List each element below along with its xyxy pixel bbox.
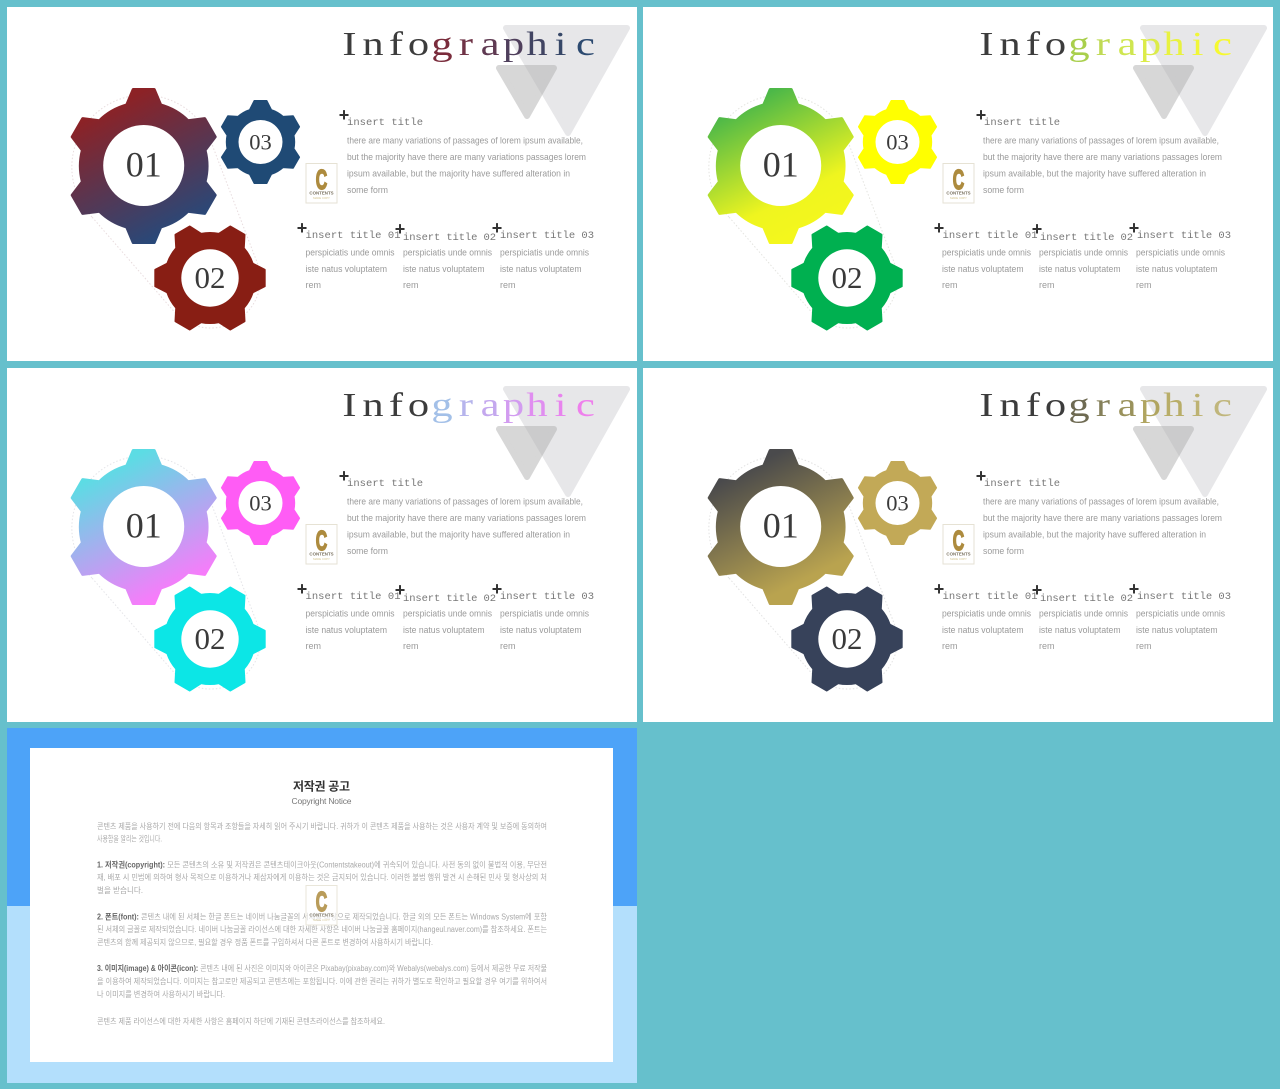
text block: title 01: + <box>934 579 944 599</box>
text block: title 01: rem <box>306 279 321 290</box>
text block: title 03: + <box>1129 218 1139 238</box>
text block: title 02: iste natus voluptatem <box>403 624 485 635</box>
text block: title 01: iste natus voluptatem <box>942 624 1024 635</box>
text block: main: insert title <box>347 478 423 490</box>
text block: main: ipsum available, but the majority have suffered alteration in <box>347 168 570 178</box>
gear 03 <box>222 462 299 544</box>
title: Infographi c <box>342 387 595 424</box>
text block: title 03: iste natus voluptatem <box>500 263 582 274</box>
text block: title 02 <box>395 580 496 651</box>
text block: main: there are many variations of passages of lorem ipsum available, <box>983 496 1219 506</box>
text block: title 02: insert title 02 <box>403 593 496 605</box>
text block: title 03: + <box>1129 579 1139 599</box>
text block: title 02: rem <box>1039 640 1055 651</box>
text block: title 03: insert title 03 <box>1137 230 1231 242</box>
dotted outline around gears <box>72 95 261 328</box>
logo <box>943 524 974 564</box>
panel: infographic dark red and navy <box>7 7 637 361</box>
logo: MADE COPY <box>313 557 330 561</box>
decorative triangles <box>499 389 627 494</box>
text block: title 02 <box>395 219 496 290</box>
text block: title 03: rem <box>500 279 516 290</box>
title: Infographi c <box>342 26 595 63</box>
text block: title 03: insert title 03 <box>1137 591 1231 603</box>
logo: CONTENTS <box>946 552 971 556</box>
logo: C <box>316 525 327 556</box>
text block: main: + <box>339 466 349 486</box>
gear 03 <box>859 462 936 544</box>
gear 03: 03 <box>886 130 909 154</box>
text block: title 02: perspiciatis unde omnis <box>1039 608 1128 618</box>
text block: main <box>976 105 1222 195</box>
text block: main <box>339 466 586 556</box>
text block: title 02: + <box>395 219 405 239</box>
text block: main: insert title <box>984 117 1060 129</box>
text block: title 01: + <box>934 218 944 238</box>
logo <box>306 164 337 203</box>
text block: image and icon <box>97 963 547 999</box>
text block: title 01: insert title 01 <box>942 591 1038 603</box>
text block: title 03: + <box>492 218 502 238</box>
text block: main: but the majority have there are many variations passages lorem <box>983 512 1222 523</box>
gear 01: 01 <box>126 144 162 184</box>
text block: title 01: iste natus voluptatem <box>942 263 1024 274</box>
text block: main: + <box>976 105 986 125</box>
text block: title 02: rem <box>403 279 419 290</box>
text block: title 03: rem <box>1136 640 1152 651</box>
text block: title 02: rem <box>1039 279 1055 290</box>
text block: title 03: perspiciatis unde omnis <box>1136 246 1225 258</box>
text block: image and icon: 나 이미지를 변경하여 사용하시기 바랍니다. <box>97 989 225 999</box>
gear 01 <box>72 450 215 604</box>
gear 02: 02 <box>832 621 862 656</box>
text block: title 03: insert title 03 <box>500 230 594 242</box>
gear 01: 01 <box>126 506 162 546</box>
panel: copyright notice <box>7 728 637 1083</box>
gear 03 <box>859 101 936 183</box>
text block: main: ipsum available, but the majority have suffered alteration in <box>347 528 570 540</box>
text block: copyright: 벌을 받습니다. <box>97 885 143 895</box>
logo: C <box>953 525 964 556</box>
text block: title 01: rem <box>306 640 321 651</box>
logo: CONTENTS <box>309 912 334 918</box>
text block: image and icon: 을 이용하여 제작되었습니다. 이미지는 참고로만 제공되고 콘텐츠에는 포함됩니다. 이에 관한 권리는 귀하가 별도로 확인하고 필요할 경우 여기를 위하여서 <box>97 976 547 986</box>
text block: title 01: insert title 01 <box>306 591 400 603</box>
dotted outline around gears <box>709 456 898 689</box>
text block: title 03: rem <box>500 640 516 651</box>
text block: copyright <box>97 860 547 895</box>
text block: intro: 콘텐츠 제품을 사용하기 전에 다음의 항목과 조항들을 자세히 읽어 주시기 바랍니다. 귀하가 이 콘텐츠 제품을 사용하는 것은 사용자 계약 및 보증에 동의하여 <box>97 821 547 831</box>
logo: MADE COPY <box>313 196 330 200</box>
text block: title 01: perspiciatis unde omnis <box>942 246 1031 258</box>
panel: infographic cyan and pink <box>7 368 637 722</box>
logo: MADE COPY <box>313 918 330 922</box>
decorative triangles <box>1136 389 1264 494</box>
text block: main: but the majority have there are many variations passages lorem <box>983 151 1222 162</box>
title: Infographi c <box>979 26 1232 63</box>
text block: main: ipsum available, but the majority have suffered alteration in <box>983 168 1206 178</box>
text block: title 01 <box>934 218 1038 290</box>
gear 02: 02 <box>194 260 226 295</box>
gear 01 <box>709 90 852 242</box>
gear 01: 01 <box>763 144 799 184</box>
heading: copyright notice: 저작권 공고 <box>293 778 350 794</box>
text block: title 02: perspiciatis unde omnis <box>403 608 492 618</box>
text block: title 03: perspiciatis unde omnis <box>500 608 589 618</box>
logo <box>943 164 974 203</box>
text block: title 01: insert title 01 <box>306 230 400 242</box>
text block: title 02: insert title 02 <box>1040 232 1133 244</box>
heading: copyright notice: Copyright Notice <box>292 796 352 806</box>
gear 02 <box>775 566 919 712</box>
gear 02 <box>138 566 282 712</box>
text block: main: some form <box>983 184 1024 195</box>
text block: main <box>339 105 586 195</box>
text block: title 02 <box>1032 219 1133 290</box>
text block: font: 콘텐츠의 함께 제공되지 않으므로, 필요할 경우 정품 폰트를 구입하셔서 다른 폰트로 변경하여 사용하시기 바랍니다. <box>97 937 433 947</box>
panel: infographic charcoal and gold <box>643 368 1273 722</box>
logo: C <box>316 164 327 195</box>
text block: title 03: + <box>492 579 502 599</box>
text block: main: some form <box>983 545 1024 556</box>
text block: title 02 <box>1032 580 1133 651</box>
text block: title 03: iste natus voluptatem <box>1136 263 1218 274</box>
text block: title 02: + <box>1032 580 1042 600</box>
text block: copyright: 재, 배포 시 민법에 의하여 형사 목적으로 이용하거나 제삼자에게 이용하는 것은 금지되어 있습니다. 이러한 불법 행위 발견 시 손해된 민사 및 형사상의 처 <box>97 872 547 882</box>
text block: image and icon: 3. 이미지(image) & 아이콘(icon): 콘텐츠 내에 된 사진은 이미지와 아이콘은 Pixabay(pixabay.com)와 Webalys(webalys.com) 등에서 제공한 무료 저작물 <box>97 963 547 973</box>
text block: title 01 <box>297 579 400 651</box>
text block: copyright: 1. 저작권(copyright): 모든 콘텐츠의 소유 및 저작권은 콘텐츠테이크아웃(Contentstakeout)에 귀속되어 있습니다. 사전 동의 없이 불법적 이용, 무단전 <box>97 860 547 870</box>
gear 03: 03 <box>249 130 272 154</box>
text block: title 03: iste natus voluptatem <box>1136 624 1218 635</box>
logo <box>306 524 337 564</box>
logo: C <box>953 164 964 195</box>
dotted outline around gears <box>72 456 261 689</box>
text block: main: there are many variations of passages of lorem ipsum available, <box>347 496 583 506</box>
text block: title 03 <box>1129 579 1231 651</box>
text block: title 01: + <box>297 218 307 238</box>
gear 02: 02 <box>832 260 862 295</box>
text block: main: there are many variations of passages of lorem ipsum available, <box>347 134 583 146</box>
text block: title 03: perspiciatis unde omnis <box>500 246 589 258</box>
gear 03: 03 <box>249 490 272 516</box>
text block: font <box>97 912 548 947</box>
text block: title 01: + <box>297 579 307 599</box>
dotted outline around gears <box>709 95 898 328</box>
text block: main: insert title <box>347 117 423 129</box>
text block: title 03 <box>492 579 594 651</box>
logo: MADE COPY <box>950 196 967 200</box>
text block: title 03 <box>492 218 594 290</box>
text block: title 03: perspiciatis unde omnis <box>1136 608 1225 618</box>
text block: main: insert title <box>984 478 1060 490</box>
gear 01 <box>72 90 215 242</box>
logo: MADE COPY <box>950 557 967 561</box>
text block: title 03: iste natus voluptatem <box>500 624 582 635</box>
logo: CONTENTS <box>309 190 334 196</box>
text block: main: some form <box>347 545 388 556</box>
text block: title 02: insert title 02 <box>403 232 496 244</box>
text block: intro: 사용함을 알리는 것입니다. <box>97 834 162 844</box>
logo: C <box>316 886 327 917</box>
text block: title 03 <box>1129 218 1231 290</box>
text block: title 02: rem <box>403 640 419 651</box>
text block: title 01: perspiciatis unde omnis <box>306 608 395 618</box>
text block: main: but the majority have there are many variations passages lorem <box>347 512 586 523</box>
title: Infographi c <box>979 387 1232 424</box>
text block: license: 콘텐츠 제품 라이선스에 대한 자세한 사항은 홈페이지 하단에 기재된 콘텐츠라이선스를 참조하세요. <box>97 1016 385 1026</box>
text block: title 03: rem <box>1136 279 1152 290</box>
text block: title 01: rem <box>942 279 958 290</box>
text block: main: + <box>339 105 349 125</box>
logo: CONTENTS <box>309 552 334 556</box>
text block: title 01: iste natus voluptatem <box>306 263 387 274</box>
gear 02 <box>138 205 282 351</box>
text block: main: some form <box>347 184 388 195</box>
text block: main: + <box>976 466 986 486</box>
text block: title 02: iste natus voluptatem <box>1039 263 1121 274</box>
panel: infographic green and yellow <box>643 7 1273 361</box>
gear 03: 03 <box>886 490 909 516</box>
text block: title 02: insert title 02 <box>1040 593 1133 605</box>
text block: intro <box>97 821 547 844</box>
decorative triangles <box>499 28 627 133</box>
text block: title 02: iste natus voluptatem <box>1039 624 1121 635</box>
text block: main: there are many variations of passages of lorem ipsum available, <box>983 134 1219 146</box>
text block: title 01 <box>297 218 400 290</box>
text block: main: ipsum available, but the majority have suffered alteration in <box>983 528 1206 540</box>
gear 01 <box>709 450 852 604</box>
text block: title 01: iste natus voluptatem <box>306 624 387 635</box>
logo <box>306 886 337 925</box>
gear 03 <box>222 101 299 183</box>
text block: main: but the majority have there are many variations passages lorem <box>347 151 586 162</box>
text block: title 02: perspiciatis unde omnis <box>403 246 492 258</box>
text block: title 02: + <box>395 580 405 600</box>
text block: main <box>976 466 1222 556</box>
text block: title 01: rem <box>942 640 958 651</box>
text block: title 02: + <box>1032 219 1042 239</box>
decorative triangles <box>1136 28 1264 133</box>
text block: font: 2. 폰트(font): 콘텐츠 내에 된 서체는 한글 폰트는 네이버 나눔글꼴의 서체를 바탕으로 제작되었습니다. 한글 외의 모든 폰트는 Windows System에 포함 <box>97 912 548 922</box>
gear 01: 01 <box>763 506 799 546</box>
gear 02 <box>775 205 919 351</box>
text block: title 01: perspiciatis unde omnis <box>306 246 395 258</box>
logo: CONTENTS <box>946 190 971 196</box>
heading: copyright notice <box>292 778 352 806</box>
text block: font: 된 서체의 글꼴로 제작되었습니다. 네이버 나눔글꼴 라이선스에 대한 자세한 사항은 네이버 나눔글꼴 홈페이지(hangeul.naver.com)를 참조하세요. 폰트는 <box>97 924 547 934</box>
text block: title 03: insert title 03 <box>500 591 594 603</box>
gear 02: 02 <box>194 621 226 656</box>
text block: title 01: insert title 01 <box>942 230 1038 242</box>
text block: title 02: iste natus voluptatem <box>403 263 485 274</box>
text block: title 01 <box>934 579 1038 651</box>
text block: title 01: perspiciatis unde omnis <box>942 608 1031 618</box>
text block: title 02: perspiciatis unde omnis <box>1039 246 1128 258</box>
